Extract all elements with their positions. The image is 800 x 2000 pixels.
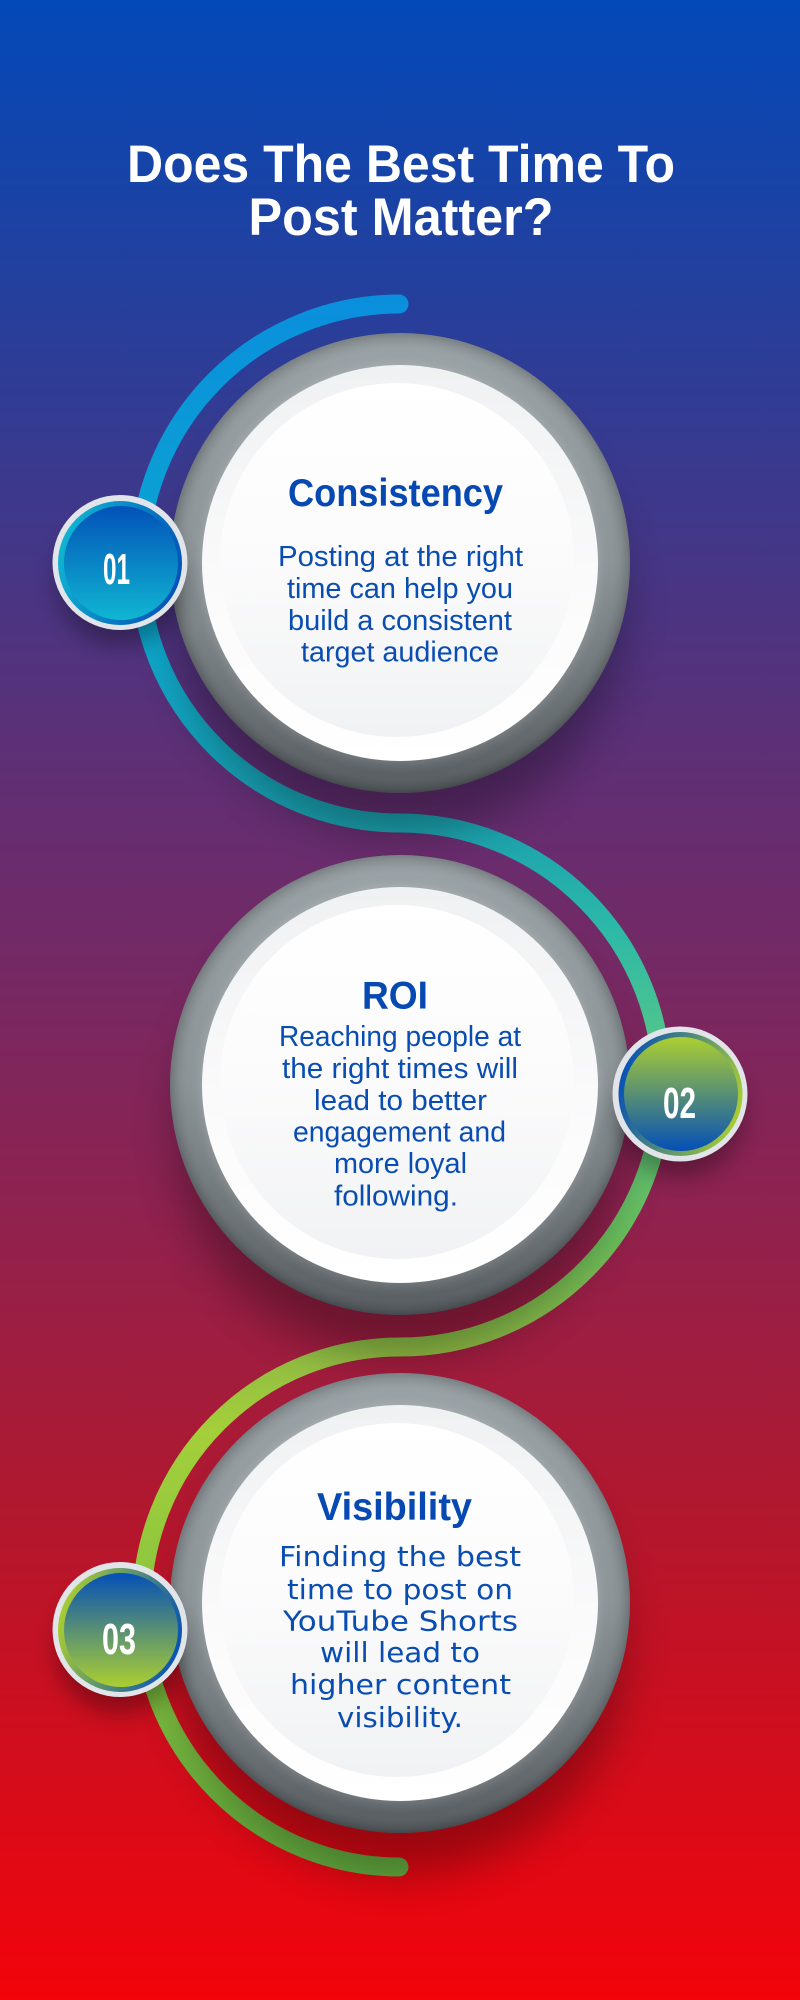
body text: following. [334,1180,458,1212]
circle shadow [176,1426,624,1874]
circle shadow [176,386,624,834]
title [127,135,675,247]
inner disc [220,1423,574,1777]
body text: build a consistent [288,605,512,637]
body text [278,541,523,668]
title: Post Matter? [248,188,554,247]
badge 03: 03 [102,1615,136,1664]
white ring [202,887,598,1283]
gray outer circle [170,1373,630,1833]
heading: Consistency: Consistency [288,472,503,515]
circle shadow [176,908,624,1356]
body text: time to post on [287,1573,513,1606]
panel: visibility [170,1373,630,1874]
white ring [202,1405,598,1801]
body text: more loyal [334,1148,467,1180]
panel: ROI [170,855,630,1356]
body text: lead to better [314,1085,488,1117]
body text [279,1540,521,1734]
body text: Posting at the right [278,541,523,573]
body text: the right times will [282,1053,518,1085]
inner disc [220,905,574,1259]
body text: engagement and [293,1116,506,1148]
badge 01: 01 [103,545,130,594]
body text: will lead to [320,1636,480,1669]
body text: YouTube Shorts [282,1604,518,1638]
body text: time can help you [287,573,513,605]
connecting ribbon line [139,304,662,1867]
body text: Reaching people at [279,1021,521,1053]
panel: consistency [170,333,630,834]
heading: ROI: ROI [362,974,428,1018]
gray outer circle [170,855,630,1315]
badge 03 [52,1562,188,1714]
badge 01 [52,495,188,646]
body text [279,1021,521,1212]
body text: target audience [301,636,499,668]
gray outer circle [170,333,630,793]
badge 02: 02 [663,1079,696,1128]
heading: Visibility: Visibility [317,1486,472,1529]
body text: visibility. [337,1701,463,1734]
white ring [202,365,598,761]
body text: higher content [290,1668,511,1701]
title: Does The Best Time To [127,135,675,194]
badge 02 [612,1026,748,1178]
inner disc [220,383,574,737]
body text: Finding the best [279,1540,521,1573]
